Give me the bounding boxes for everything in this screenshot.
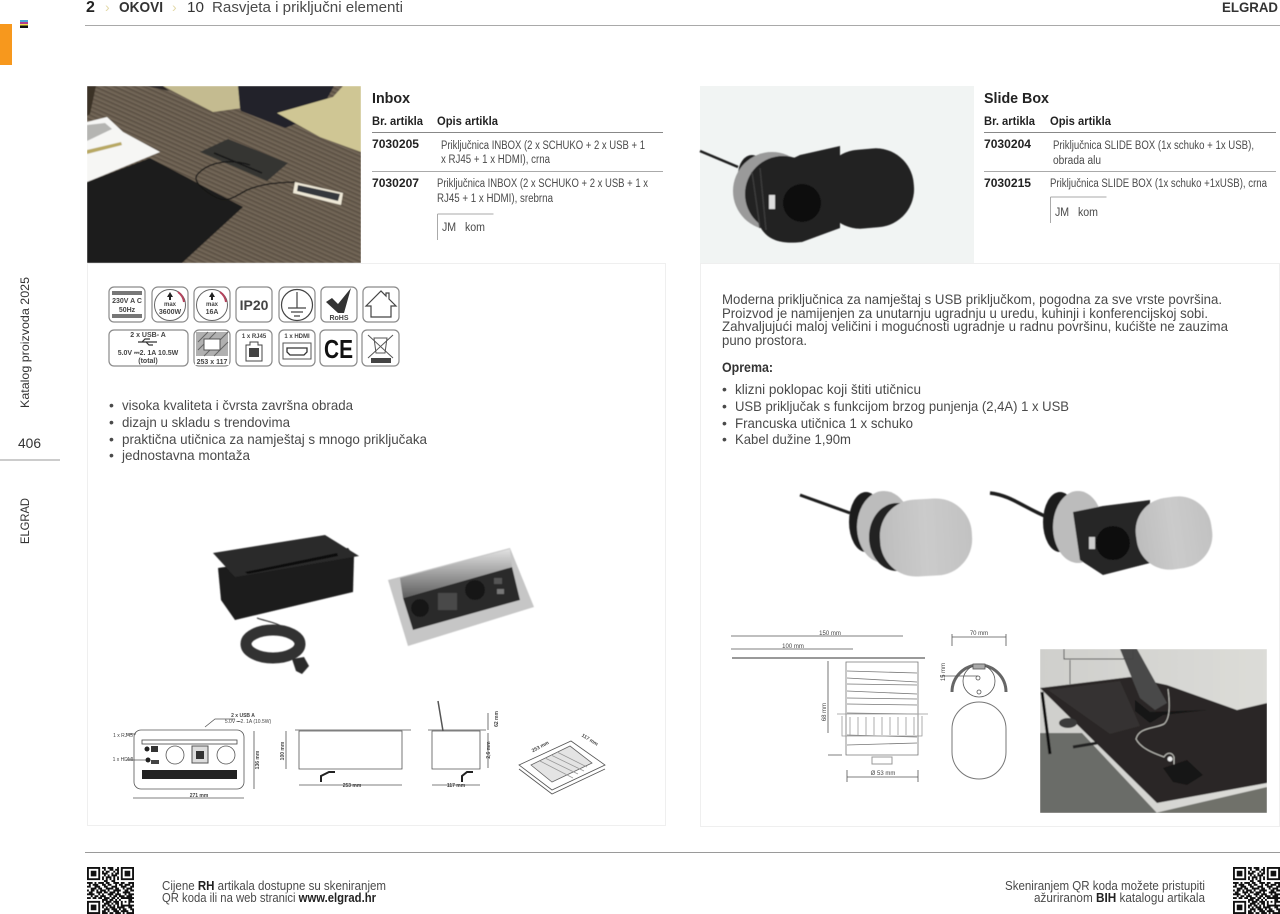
technical drawing: Slide Box side: 68 mm (822, 703, 828, 721)
text block: equipment list: • (722, 398, 727, 414)
text: footer right (1005, 879, 1205, 905)
icon: max 3600W (152, 287, 188, 322)
icon: indoor house (363, 287, 399, 322)
icon: max 3600W: 3600W (159, 309, 181, 316)
text block: Inbox features: • (109, 397, 114, 413)
technical drawing: Inbox cut-out (519, 733, 605, 794)
table: Slide Box articles: Opis artikla (1050, 114, 1111, 128)
text block: Inbox features: jednostavna montaža (121, 447, 250, 463)
table: Inbox articles: RJ45 + 1 x HDMI), srebrna (437, 193, 554, 205)
table: Slide Box articles: obrada alu (1053, 155, 1101, 167)
technical drawing: Inbox side short: 62 mm (494, 711, 500, 727)
icon: RJ45: 1 x RJ45 (242, 334, 267, 340)
text block: equipment list: Kabel dužine 1,90m (735, 431, 851, 447)
icon: USB (109, 330, 188, 366)
product photo: black Inbox with cable (213, 535, 359, 674)
technical drawing: Inbox side short: 2,6 mm (486, 741, 492, 759)
table: Inbox articles: Priključnica INBOX (2 x SCHUKO + 2 x USB + 1 x (437, 178, 648, 190)
icon: RJ45 (236, 330, 272, 366)
table: Inbox articles (372, 114, 663, 240)
photo: Slide Box on desk (1040, 649, 1267, 813)
text block: Inbox features: • (109, 414, 114, 430)
text block: Inbox features: praktična utičnica za namještaj s mnogo priključaka (122, 431, 427, 447)
icon grid: Inbox specifications (109, 287, 399, 366)
table: Inbox articles: JM kom (442, 222, 485, 234)
table: Inbox articles: Br. artikla (372, 114, 423, 128)
icon: max 16A: 16A (206, 309, 218, 316)
technical drawing: Inbox front: 136 mm (255, 750, 261, 769)
text block: equipment list: klizni poklopac koji štiti utičnicu (735, 381, 921, 397)
icon: USB: (total) (138, 358, 158, 365)
QR code: catalogue (1233, 868, 1280, 913)
table: Slide Box articles (984, 114, 1276, 223)
product photo: silver Slide Box open (990, 491, 1217, 575)
icon: 230V AC 50Hz: 50Hz (119, 307, 136, 314)
icon: cut-out size: 253 x 117 (197, 359, 227, 366)
icon: 230V AC 50Hz: 230V A C (112, 298, 142, 305)
technical drawing: Inbox front: 1 x HDMI (113, 757, 133, 763)
icon: IP20 (236, 287, 272, 322)
text block: Inbox features: visoka kvaliteta i čvrsta završna obrada (122, 397, 353, 413)
catalogue label: Katalog proizvoda 2025 (18, 277, 32, 408)
technical drawing: Inbox side long (280, 730, 411, 789)
text block: equipment list: Francuska utičnica 1 x schuko (735, 415, 913, 431)
table: Inbox articles: 7030205 (372, 137, 419, 151)
text: footer right: Skeniranjem QR koda možete pristupiti (1005, 879, 1205, 893)
product photo: silver Inbox open (388, 548, 534, 646)
QR code: prices (87, 868, 134, 913)
text block: Inbox features: dizajn u skladu s trendovima (122, 414, 290, 430)
icon: USB: 5.0V ⎓2. 1A 10.5W (118, 350, 179, 357)
table: Inbox articles: Opis artikla (437, 114, 498, 128)
text block: Slide Box description: Proizvod je namijenjen za unutarnju ugradnju u uredu, kuhinji i konferencijskoj sobi. (722, 305, 1208, 321)
heading: Slide Box: Slide Box (984, 90, 1050, 107)
panel: Slide Box details (700, 264, 1280, 826)
technical drawing: Slide Box side: 100 mm (782, 644, 804, 650)
brand label: ELGRAD (18, 498, 32, 544)
breadcrumb header (85, 0, 1280, 26)
icon: RoHS (321, 287, 357, 322)
icon: CE (320, 330, 357, 366)
technical drawing: Slide Box side: Ø 53 mm (871, 771, 895, 777)
table: Slide Box articles: JM kom (1055, 207, 1098, 219)
page number: 406 (18, 435, 41, 451)
heading: Inbox: Inbox (372, 90, 411, 107)
icon: cut-out size (194, 330, 230, 366)
icon: 230V AC 50Hz (109, 287, 145, 322)
icon: USB: 2 x USB- A (130, 332, 166, 339)
text block: equipment list (722, 359, 1069, 447)
table: Slide Box articles: 7030204 (984, 137, 1031, 151)
technical drawing: Inbox front: 271 mm (190, 793, 209, 799)
technical drawing: Inbox cut-out: 253 mm (531, 740, 551, 754)
icon: RoHS: RoHS (329, 315, 349, 322)
table: Inbox articles: 7030207 (372, 176, 419, 190)
technical drawing: Slide Box front: 15 mm (941, 663, 947, 681)
technical drawing: Slide Box side: 150 mm (819, 631, 841, 637)
technical drawing: Inbox front: 5.0V ⎓2. 1A (10.5W) (225, 719, 271, 725)
technical drawing: Slide Box front: 70 mm (970, 631, 988, 637)
table: Slide Box articles: 7030215 (984, 176, 1031, 190)
technical drawing: Inbox front (113, 713, 271, 799)
technical drawing: Inbox side short (428, 701, 500, 789)
text block: Slide Box description (722, 291, 1228, 348)
product photo: silver Slide Box closed (800, 491, 974, 578)
technical drawing: Inbox side long: 100 mm (280, 741, 286, 760)
text block: equipment list: • (722, 381, 727, 397)
technical drawing: Inbox front: 1 x RJ45 (113, 733, 133, 739)
text: footer left: QR koda ili na web stranici www.elgrad.hr (162, 891, 376, 905)
photo: Inbox on conference table (87, 86, 361, 263)
colour mark (20, 20, 28, 28)
text: footer right: ažuriranom BIH katalogu artikala (1034, 891, 1205, 905)
text block: equipment list: Oprema: (722, 359, 773, 375)
icon: WEEE (362, 330, 399, 366)
technical drawing: Inbox cut-out: 117 mm (580, 733, 599, 748)
icon: max 16A: max (206, 302, 219, 308)
technical drawing: Inbox side short: 117 mm (447, 783, 466, 789)
technical drawing: Slide Box front (940, 631, 1006, 779)
technical drawing: Inbox side long: 253 mm (343, 783, 362, 789)
sidebar (0, 20, 60, 544)
table: Inbox articles: Priključnica INBOX (2 x SCHUKO + 2 x USB + 1 (441, 140, 645, 152)
orange tab (0, 24, 12, 65)
text block: Inbox features (109, 397, 427, 463)
icon: HDMI: 1 x HDMI (284, 334, 310, 340)
text block: equipment list: • (722, 431, 727, 447)
technical drawing: Inbox front: 2 x USB A (231, 713, 255, 719)
photo: black Slide Box (700, 86, 974, 263)
table: Slide Box articles: Br. artikla (984, 114, 1035, 128)
technical drawing: Slide Box side (731, 631, 928, 782)
icon: CE: CE (324, 334, 353, 364)
table: Inbox articles: x RJ45 + 1 x HDMI), crna (441, 154, 550, 166)
text block: equipment list: USB priključak s funkcijom brzog punjenja (2,4A) 1 x USB (735, 398, 1069, 414)
icon: IP20: IP20 (240, 297, 269, 313)
text block: Slide Box description: Moderna priključnica za namještaj s USB priključkom, pogodna za sve vrste površina. (722, 291, 1222, 307)
text: footer left (162, 879, 386, 905)
icon: max 3600W: max (164, 302, 177, 308)
icon: earth (279, 287, 315, 322)
panel: Inbox details (88, 264, 666, 826)
text: footer left: Cijene RH artikala dostupne su skeniranjem (162, 879, 386, 893)
text block: Slide Box description: puno prostora. (722, 332, 807, 348)
footer rule (85, 852, 1280, 853)
text block: Slide Box description: Zahvaljujući maloj veličini i mogućnosti ugradnje u radnu površinu, kućište ne zauzima (722, 318, 1228, 334)
text block: equipment list: • (722, 415, 727, 431)
text block: Inbox features: • (109, 431, 114, 447)
text block: Inbox features: • (109, 447, 114, 463)
icon: max 16A (194, 287, 230, 322)
icon: HDMI (279, 330, 315, 366)
